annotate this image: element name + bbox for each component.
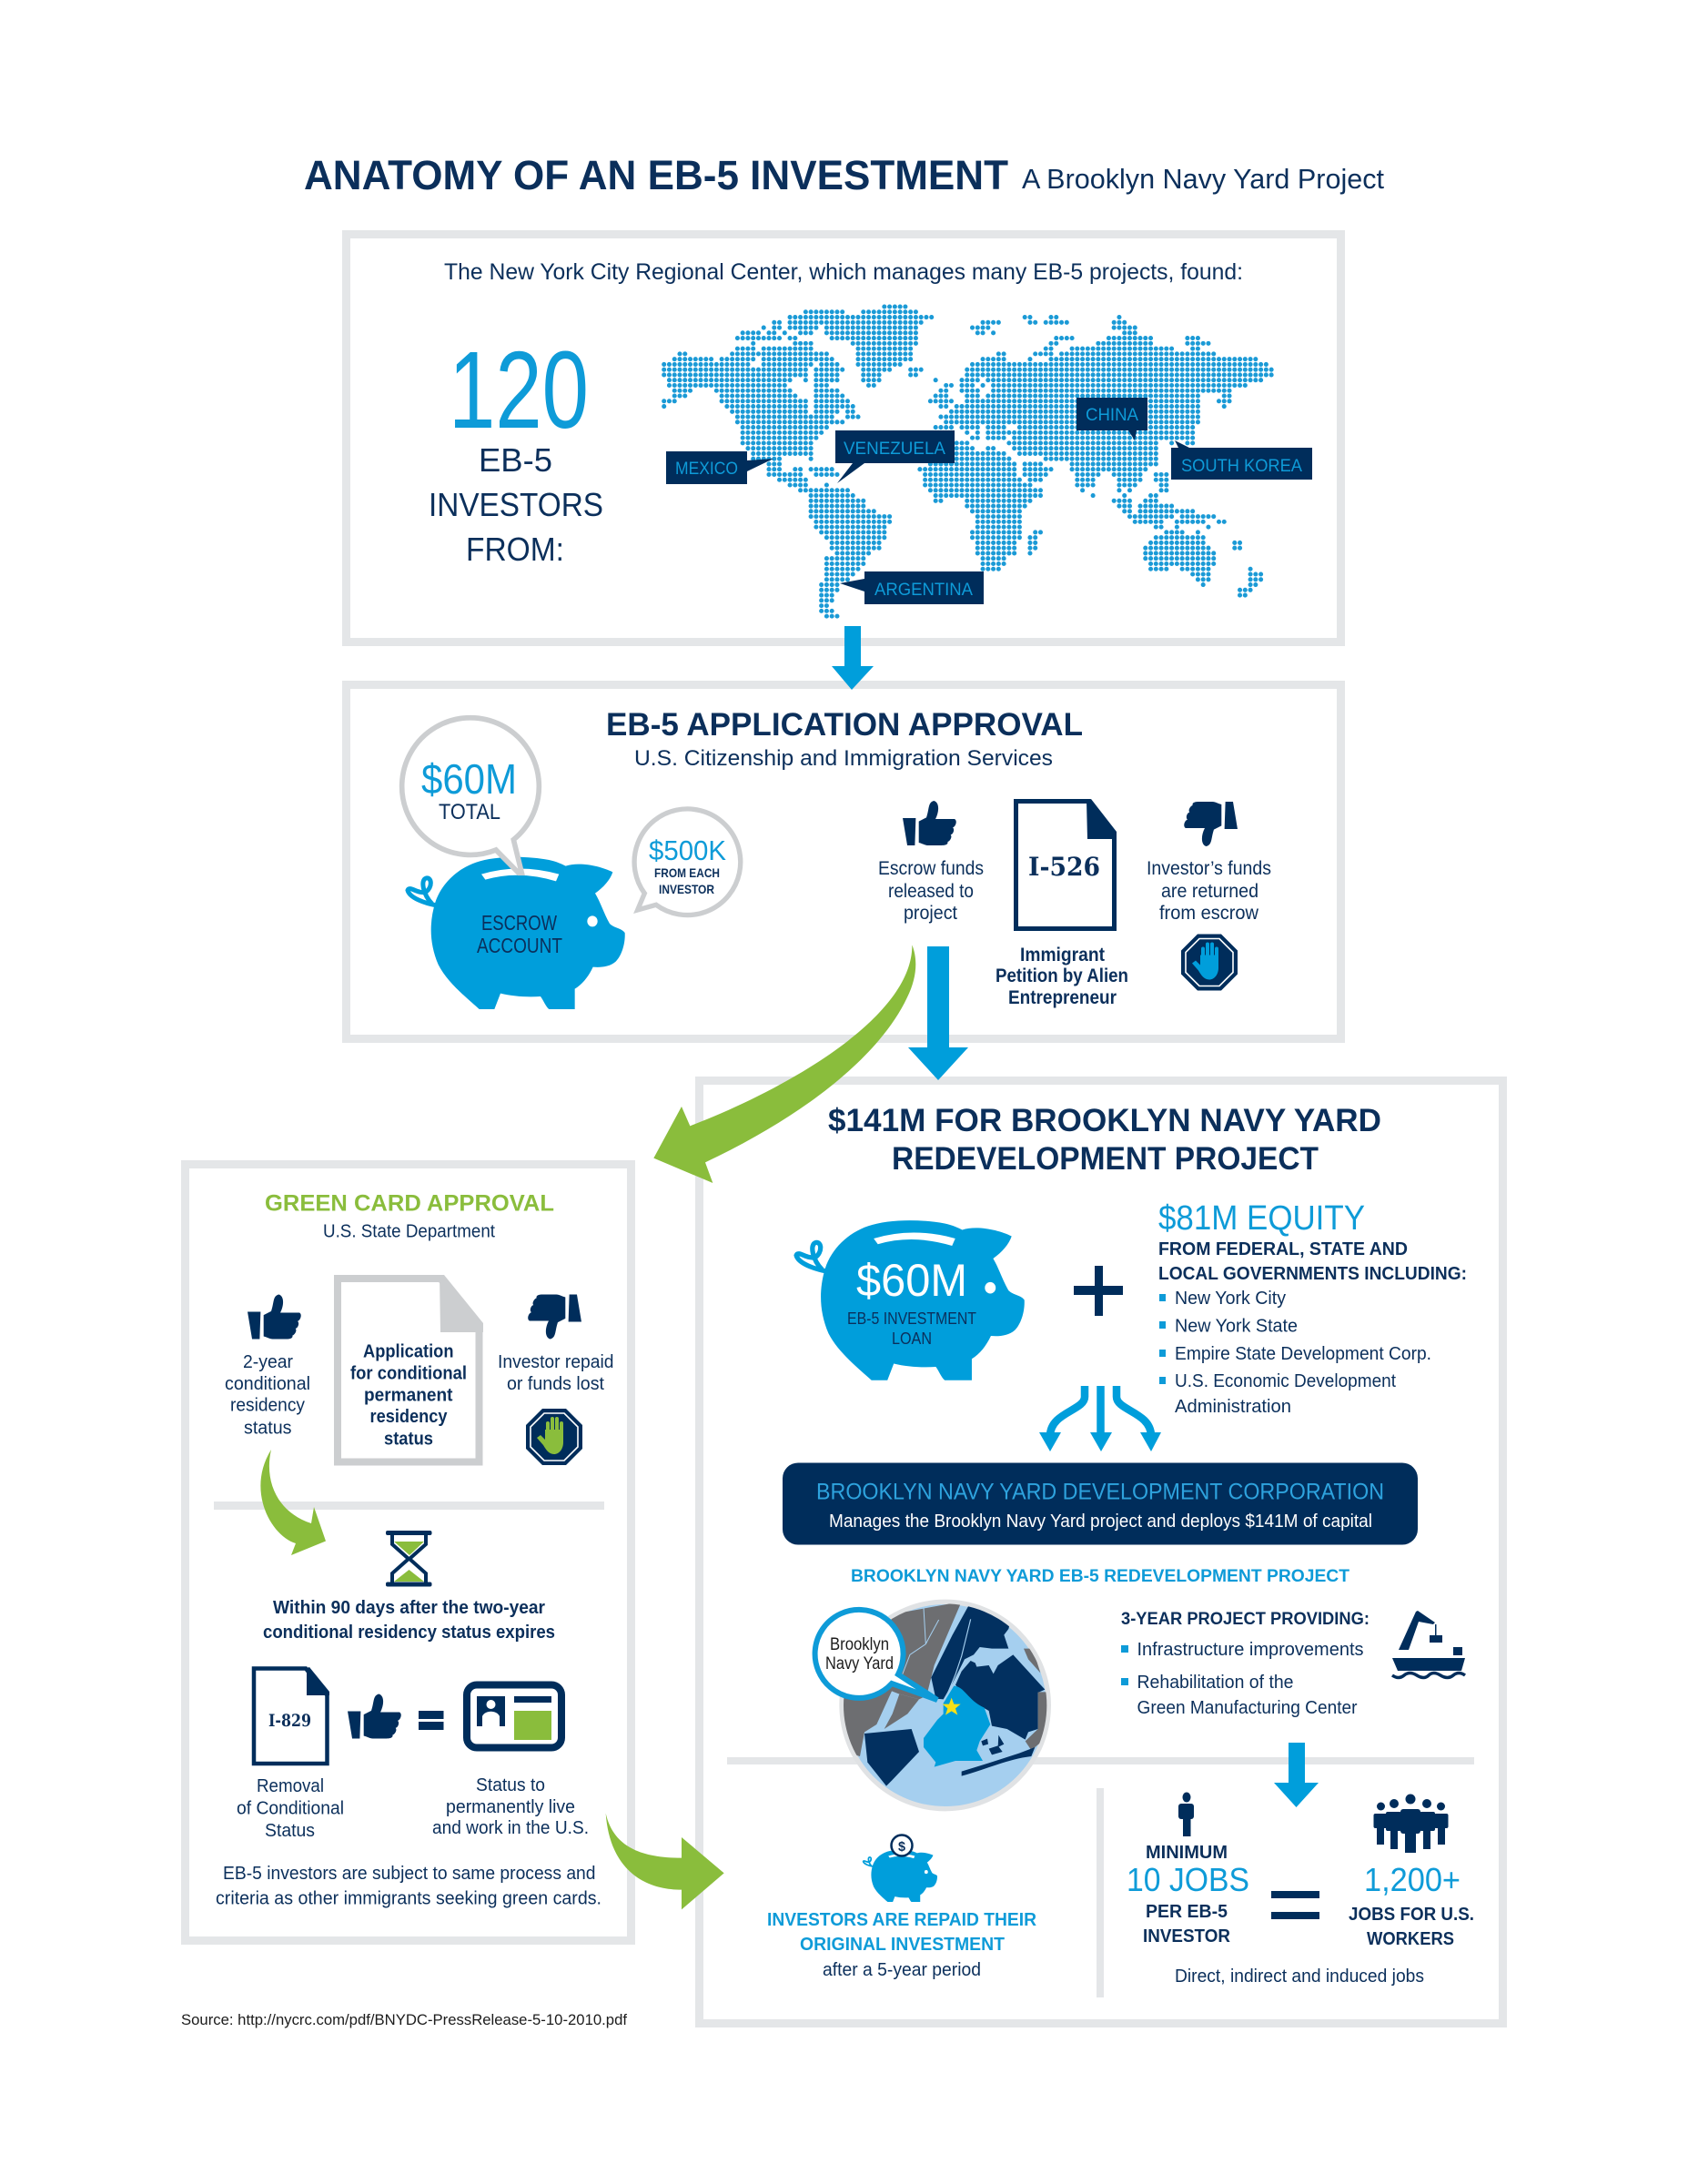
map label: China: CHINA <box>1086 406 1138 425</box>
arrow: map to application <box>832 626 874 690</box>
equity block <box>1158 1199 1467 1417</box>
speech bubble: $500K from each investor: $500K <box>649 834 726 866</box>
panel footnote: criteria as other immigrants seeking green cards. <box>216 1889 601 1909</box>
icon: escrow piggy bank: ESCROW <box>481 911 557 935</box>
jobs footnote: Direct, indirect and induced jobs <box>1175 1966 1424 1987</box>
map label: Mexico <box>666 451 773 484</box>
map label: Venezuela <box>835 430 955 483</box>
subheading: U.S. Citizenship and Immigration Services <box>634 746 1053 771</box>
icon: thumbs up <box>248 1294 301 1339</box>
speech bubble: Brooklyn Navy Yard <box>815 1610 937 1700</box>
denied status text: Investor repaid <box>498 1352 613 1372</box>
document: application for conditional permanent residency: permanent <box>364 1385 453 1405</box>
status caption: and work in the U.S. <box>432 1818 589 1838</box>
document: I-829 <box>254 1667 329 1764</box>
document caption: Petition by Alien <box>996 966 1128 986</box>
speech bubble: $60M total <box>402 718 539 873</box>
jobs per investor <box>1127 1843 1249 1946</box>
icon: equals sign <box>1271 1891 1319 1919</box>
icon: $60M piggy bank: EB-5 INVESTMENT <box>847 1309 976 1328</box>
document: application for conditional permanent residency: Application <box>363 1341 453 1361</box>
callout: Brooklyn Navy Yard Development Corporation: Manages the Brooklyn Navy Yard project and deploys $141M of capital <box>829 1512 1372 1532</box>
panel: green card approval <box>186 1165 632 1940</box>
document: I-526 <box>1016 799 1117 928</box>
panel footnote: EB-5 investors are subject to same process and <box>223 1864 595 1884</box>
icon: equals sign <box>419 1711 444 1730</box>
map label: South Korea: SOUTH KOREA <box>1181 457 1302 476</box>
arrow: green card to repayment <box>606 1814 724 1909</box>
equity block: New York City <box>1175 1288 1287 1309</box>
approved status text: status <box>244 1418 291 1438</box>
panel: investor origins <box>346 235 1341 642</box>
heading: $141M FOR BROOKLYN NAVY YARD <box>828 1103 1381 1138</box>
icon: group of workers <box>1374 1795 1449 1853</box>
heading: REDEVELOPMENT PROJECT <box>892 1141 1319 1177</box>
icon: single worker <box>1178 1793 1194 1836</box>
document: application for conditional permanent residency <box>338 1275 483 1461</box>
map label: Mexico: MEXICO <box>675 460 738 479</box>
project scope list: Infrastructure improvements <box>1137 1639 1363 1660</box>
title: ANATOMY OF AN EB-5 INVESTMENT <box>304 152 1008 198</box>
icon: investor repaid piggy bank with coin: $ <box>898 1839 906 1855</box>
total jobs: WORKERS <box>1367 1929 1454 1949</box>
denied status text: or funds lost <box>507 1374 604 1394</box>
statistic: 120 EB-5 investors <box>429 328 603 568</box>
denied outcome text: Investor’s funds <box>1147 858 1271 879</box>
document: application for conditional permanent residency: status <box>384 1429 433 1449</box>
timing text <box>263 1598 555 1643</box>
speech bubble: Brooklyn Navy Yard: Navy Yard <box>825 1654 894 1673</box>
jobs per investor: INVESTOR <box>1143 1926 1231 1946</box>
document caption: Immigrant <box>1020 945 1105 966</box>
icon: hourglass <box>386 1531 431 1587</box>
title <box>304 152 1384 198</box>
panel: $141M redevelopment project <box>699 1081 1503 2024</box>
approved status text: conditional <box>225 1374 310 1394</box>
subtitle: A Brooklyn Navy Yard Project <box>1022 163 1384 195</box>
map: New York City circle <box>837 1602 1049 1809</box>
speech bubble: $500K from each investor <box>634 809 741 915</box>
icon: thumbs down <box>528 1295 581 1340</box>
speech bubble: Brooklyn Navy Yard: Brooklyn <box>830 1635 889 1654</box>
document: I-526: I-526 <box>1028 852 1100 882</box>
icon: escrow piggy bank <box>408 857 625 1009</box>
equity block: New York State <box>1175 1316 1298 1336</box>
document caption <box>996 945 1128 1008</box>
approved outcome text: project <box>904 903 957 924</box>
document caption: Entrepreneur <box>1008 987 1117 1008</box>
panel footnote <box>216 1864 601 1909</box>
map label: Argentina <box>840 571 984 604</box>
speech bubble: $500K from each investor: INVESTOR <box>659 882 714 896</box>
jobs per investor: 10 JOBS <box>1127 1861 1249 1898</box>
approved status text <box>225 1352 310 1438</box>
equity block: LOCAL GOVERNMENTS INCLUDING: <box>1158 1264 1467 1284</box>
removal caption: of Conditional <box>237 1798 344 1818</box>
icon: project location star <box>943 1698 961 1715</box>
approved outcome text <box>878 858 984 924</box>
callout: Brooklyn Navy Yard Development Corporation: BROOKLYN NAVY YARD DEVELOPMENT CORPORATION <box>816 1480 1384 1505</box>
status caption: Status to <box>476 1775 545 1795</box>
timing text: conditional residency status expires <box>263 1623 555 1643</box>
approved status text: 2-year <box>243 1352 293 1372</box>
status caption: permanently live <box>446 1797 575 1817</box>
arrows: funds into corporation <box>1039 1386 1161 1451</box>
denied outcome text <box>1147 858 1271 924</box>
speech bubble: $60M total: TOTAL <box>439 800 500 824</box>
total jobs <box>1349 1861 1474 1949</box>
subheading: U.S. State Department <box>323 1221 495 1241</box>
project scope list: Green Manufacturing Center <box>1137 1697 1358 1718</box>
statistic: 120 EB-5 investors: 120 <box>449 328 589 451</box>
repayment text <box>767 1909 1036 1980</box>
icon: plus sign <box>1074 1266 1123 1316</box>
document: I-829: I-829 <box>268 1711 311 1731</box>
speech bubble: $60M total: $60M <box>421 755 517 803</box>
heading: GREEN CARD APPROVAL <box>265 1190 554 1216</box>
removal caption <box>237 1776 344 1841</box>
approved outcome text: Escrow funds <box>878 858 984 879</box>
statistic: 120 EB-5 investors: FROM: <box>466 531 564 568</box>
equity block: $81M EQUITY <box>1158 1199 1365 1238</box>
map label: Argentina: ARGENTINA <box>874 581 973 600</box>
repayment text: after a 5-year period <box>823 1959 981 1980</box>
icon: $60M piggy bank: $60M <box>856 1255 967 1306</box>
icon: thumbs up <box>903 801 956 845</box>
icon: green card <box>467 1685 561 1747</box>
jobs per investor: MINIMUM <box>1146 1843 1228 1863</box>
equity block: Empire State Development Corp. <box>1175 1343 1431 1364</box>
icon: thumbs up <box>348 1694 401 1738</box>
heading <box>828 1103 1381 1177</box>
dot world map <box>664 307 1271 616</box>
icon: stop hand <box>526 1409 582 1465</box>
jobs per investor: PER EB-5 <box>1146 1902 1228 1922</box>
map label: Venezuela: VENEZUELA <box>844 440 945 459</box>
arrow: approval to redevelopment project <box>908 946 968 1080</box>
icon: thumbs down <box>1184 802 1238 846</box>
denied outcome text: are returned <box>1161 881 1258 902</box>
denied outcome text: from escrow <box>1159 903 1259 924</box>
document: application for conditional permanent residency: residency <box>369 1407 448 1427</box>
approved outcome text: released to <box>888 881 974 902</box>
removal caption: Removal <box>257 1776 324 1796</box>
total jobs: 1,200+ <box>1364 1861 1461 1898</box>
source note: Source: http://nycrc.com/pdf/BNYDC-PressRelease-5-10-2010.pdf <box>181 2011 627 2028</box>
total jobs: JOBS FOR U.S. <box>1349 1905 1474 1925</box>
project scope list <box>1121 1610 1370 1718</box>
arrow: status to timing <box>260 1450 326 1555</box>
map label: South Korea <box>1171 440 1312 480</box>
denied status text <box>498 1352 613 1394</box>
arrow: project to jobs <box>1274 1743 1319 1807</box>
icon: escrow piggy bank: ACCOUNT <box>477 934 562 957</box>
icon: investor repaid piggy bank with coin <box>864 1835 937 1902</box>
repayment text: ORIGINAL INVESTMENT <box>800 1934 1005 1955</box>
equity block: Administration <box>1175 1396 1291 1417</box>
map label: China <box>1076 398 1147 440</box>
status caption <box>432 1775 589 1838</box>
equity block: FROM FEDERAL, STATE AND <box>1158 1239 1408 1259</box>
timing text: Within 90 days after the two-year <box>273 1598 545 1618</box>
heading: EB-5 APPLICATION APPROVAL <box>606 707 1083 743</box>
project scope list: Rehabilitation of the <box>1137 1672 1294 1693</box>
icon: stop hand <box>1181 934 1238 990</box>
icon: $60M piggy bank: LOAN <box>892 1330 932 1348</box>
icon: $60M piggy bank <box>796 1220 1025 1380</box>
repayment text: INVESTORS ARE REPAID THEIR <box>767 1909 1036 1930</box>
arrow: approval to green card <box>653 945 915 1183</box>
intro sentence: The New York City Regional Center, which manages many EB-5 projects, found: <box>444 259 1243 285</box>
callout: Brooklyn Navy Yard Development Corporation <box>783 1463 1418 1545</box>
project scope list: 3-YEAR PROJECT PROVIDING: <box>1121 1610 1370 1629</box>
equity block: U.S. Economic Development <box>1175 1370 1396 1391</box>
removal caption: Status <box>265 1821 315 1841</box>
statistic: 120 EB-5 investors: INVESTORS <box>429 486 603 523</box>
section heading: redevelopment project: BROOKLYN NAVY YARD EB-5 REDEVELOPMENT PROJECT <box>851 1567 1349 1586</box>
panel: EB-5 application approval <box>346 684 1341 1039</box>
approved status text: residency <box>230 1396 305 1416</box>
document: application for conditional permanent residency: for conditional <box>350 1363 467 1383</box>
statistic: 120 EB-5 investors: EB-5 <box>479 441 552 479</box>
speech bubble: $500K from each investor: FROM EACH <box>654 865 720 880</box>
icon: ship with crane <box>1392 1611 1465 1678</box>
